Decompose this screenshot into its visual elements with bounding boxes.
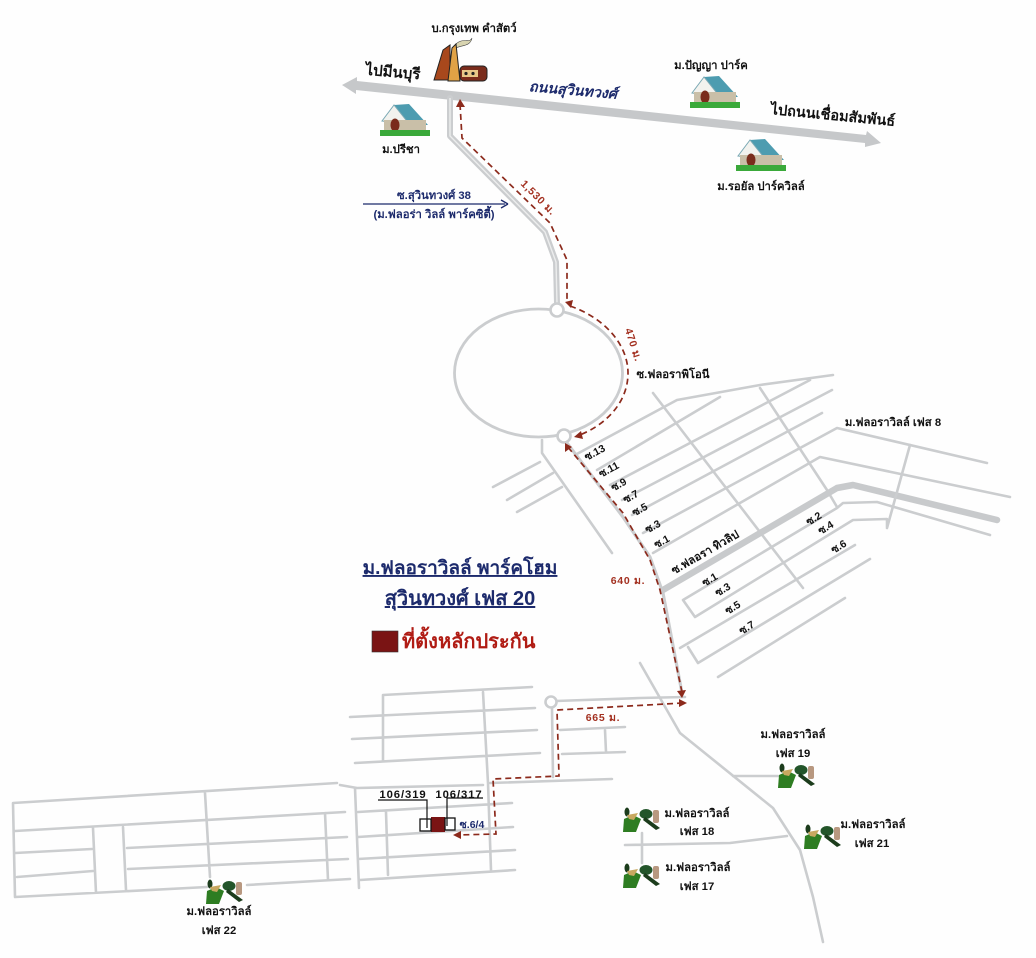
label: Floraville phase 19: ม.ฟลอราวิลล์	[761, 727, 826, 741]
label: Floraville phase 22	[187, 904, 252, 937]
arrow head bottom of 640 m	[677, 690, 686, 698]
plot 106/319	[420, 819, 431, 831]
soi labels north of Flora Tulip: ซ.7	[621, 488, 641, 506]
streets south of Flora Tulip	[680, 445, 990, 677]
soi labels south of Flora Tulip: ซ.4	[816, 519, 836, 537]
distance label 665 m: 665 ม.	[586, 712, 620, 724]
Flora Peony streets	[575, 375, 1010, 588]
label: Soi 6/4: ซ.6/4	[460, 819, 484, 831]
label: Floraville phase 22: ม.ฟลอราวิลล์	[187, 904, 252, 918]
label: Floraville phase 18	[665, 806, 730, 838]
icon: house Royal Parkville	[736, 139, 786, 171]
roundabout south	[558, 430, 570, 442]
icon: landscape phase 17	[623, 864, 660, 888]
connector road to lower roundabout	[340, 697, 685, 788]
label: Floraville phase 21: ม.ฟลอราวิลล์	[841, 817, 906, 831]
phase 20 grid	[350, 687, 625, 888]
ring road	[454, 309, 622, 437]
legend: collateral location: ที่ตั้งหลักประกัน	[402, 626, 536, 653]
soi labels south of Flora Tulip: ซ.6	[829, 538, 849, 556]
soi labels south of Flora Tulip: ซ.2	[804, 510, 824, 528]
Soi Suwinthawong 38 access road	[450, 98, 557, 304]
label: Suwinthawong road: ถนนสุวินทวงศ์	[528, 78, 622, 104]
arrow head at ring north	[565, 300, 573, 308]
roundabout north	[550, 304, 564, 316]
title: สุวินทวงศ์ เฟส 20	[385, 587, 535, 611]
Flora Tulip thick road	[663, 485, 997, 590]
callout: Soi Suwinthawong 38: (ม.ฟลอร่า วิลล์ พาร์คซิตี้)	[373, 205, 495, 221]
label: Floraville phase 19	[761, 727, 826, 760]
soi labels south of Flora Tulip: ซ.1	[700, 571, 720, 589]
label: Pricha village: ม.ปรีชา	[382, 143, 420, 156]
red dashed route	[453, 99, 687, 839]
soi labels north of Flora Tulip	[583, 443, 672, 551]
western branch roads	[493, 440, 612, 553]
label: 106/319: 106/319	[379, 789, 427, 801]
spine road from ring to lower junction	[567, 443, 682, 693]
label: Flora Peony: ซ.ฟลอราพิโอนี	[637, 367, 710, 381]
route segment 665 m	[457, 703, 683, 835]
label: Floraville phase 17	[666, 860, 731, 893]
icon: landscape phase 22	[206, 880, 243, 904]
label: Floraville phase 21	[841, 817, 906, 850]
soi labels south of Flora Tulip	[700, 510, 849, 637]
soi labels south of Flora Tulip: ซ.7	[737, 619, 757, 637]
label: Royal Parkville: ม.รอยัล ปาร์ควิลล์	[717, 179, 805, 193]
arrow head at soi 6/4	[453, 831, 461, 839]
distance label 470 m: 470 ม.	[622, 327, 644, 363]
lower roundabout	[546, 696, 556, 708]
main road: Suwinthawong	[342, 77, 881, 147]
icon: house Panya Park	[690, 76, 740, 108]
label: 106/317: 106/317	[435, 789, 483, 801]
soi labels north of Flora Tulip: ซ.1	[652, 533, 672, 551]
label: Floraville phase 22: เฟส 22	[202, 924, 236, 937]
arrow head east	[679, 699, 687, 707]
label: Floraville phase 18: ม.ฟลอราวิลล์	[665, 806, 730, 820]
distance label 1,530 m: 1,530 ม.	[518, 178, 558, 218]
label: Floraville phase 19: เฟส 19	[776, 747, 810, 760]
soi labels north of Flora Tulip: ซ.11	[597, 460, 621, 480]
arrow head north	[456, 99, 465, 107]
route segment 640 m	[567, 446, 682, 692]
callout: Soi Suwinthawong 38: ซ.สุวินทวงศ์ 38	[397, 188, 471, 203]
red collateral plot	[431, 817, 445, 832]
leader lines	[378, 798, 483, 828]
icon: factory	[434, 38, 487, 81]
icon: landscape phase 18	[623, 808, 660, 832]
arrow head at ring south	[574, 431, 583, 439]
plot 106/317	[445, 818, 455, 830]
label: Soi Flora Tulip: ซ.ฟลอรา ทิวลิป	[669, 528, 741, 577]
label: Floraville phase 17: เฟส 17	[680, 880, 714, 893]
label: Bangkok Kamsat company: บ.กรุงเทพ คำสัตว์	[431, 21, 517, 36]
label: to Minburi: ไปมีนบุรี	[363, 59, 422, 84]
soi labels north of Flora Tulip: ซ.9	[609, 476, 629, 494]
icon: landscape phase 19	[778, 764, 815, 788]
label: Floraville phase 18: เฟส 18	[680, 825, 714, 838]
soi labels south of Flora Tulip: ซ.3	[713, 581, 733, 599]
label: Floraville phase 8: ม.ฟลอราวิลล์ เฟส 8	[845, 415, 941, 429]
callout: Soi Suwinthawong 38	[363, 188, 508, 221]
arrow head top of 640 m	[565, 443, 572, 452]
distance label 640 m: 640 ม.	[611, 575, 645, 587]
soi labels south of Flora Tulip: ซ.5	[723, 599, 743, 617]
title: ม.ฟลอราวิลล์ พาร์คโฮม	[363, 556, 557, 579]
route segment 470 m	[570, 306, 628, 436]
south-east road	[625, 663, 823, 942]
soi labels north of Flora Tulip: ซ.3	[643, 518, 663, 536]
west grid phase 22	[13, 783, 350, 897]
soi labels north of Flora Tulip: ซ.5	[630, 501, 650, 519]
label: Panya Park: ม.ปัญญา ปาร์ค	[674, 58, 748, 72]
title	[363, 556, 557, 611]
label: Floraville phase 21: เฟส 21	[855, 837, 889, 850]
route segment 1,530 m	[460, 104, 567, 299]
soi labels north of Flora Tulip: ซ.13	[583, 443, 608, 463]
label: Floraville phase 17: ม.ฟลอราวิลล์	[666, 860, 731, 874]
icon: house Pricha	[380, 104, 430, 136]
icon: landscape phase 21	[804, 824, 841, 849]
label: to Chuam Samphan road: ไปถนนเชื่อมสัมพันธ์	[768, 98, 896, 130]
legend: collateral location	[372, 626, 536, 653]
subject plots	[378, 798, 483, 832]
